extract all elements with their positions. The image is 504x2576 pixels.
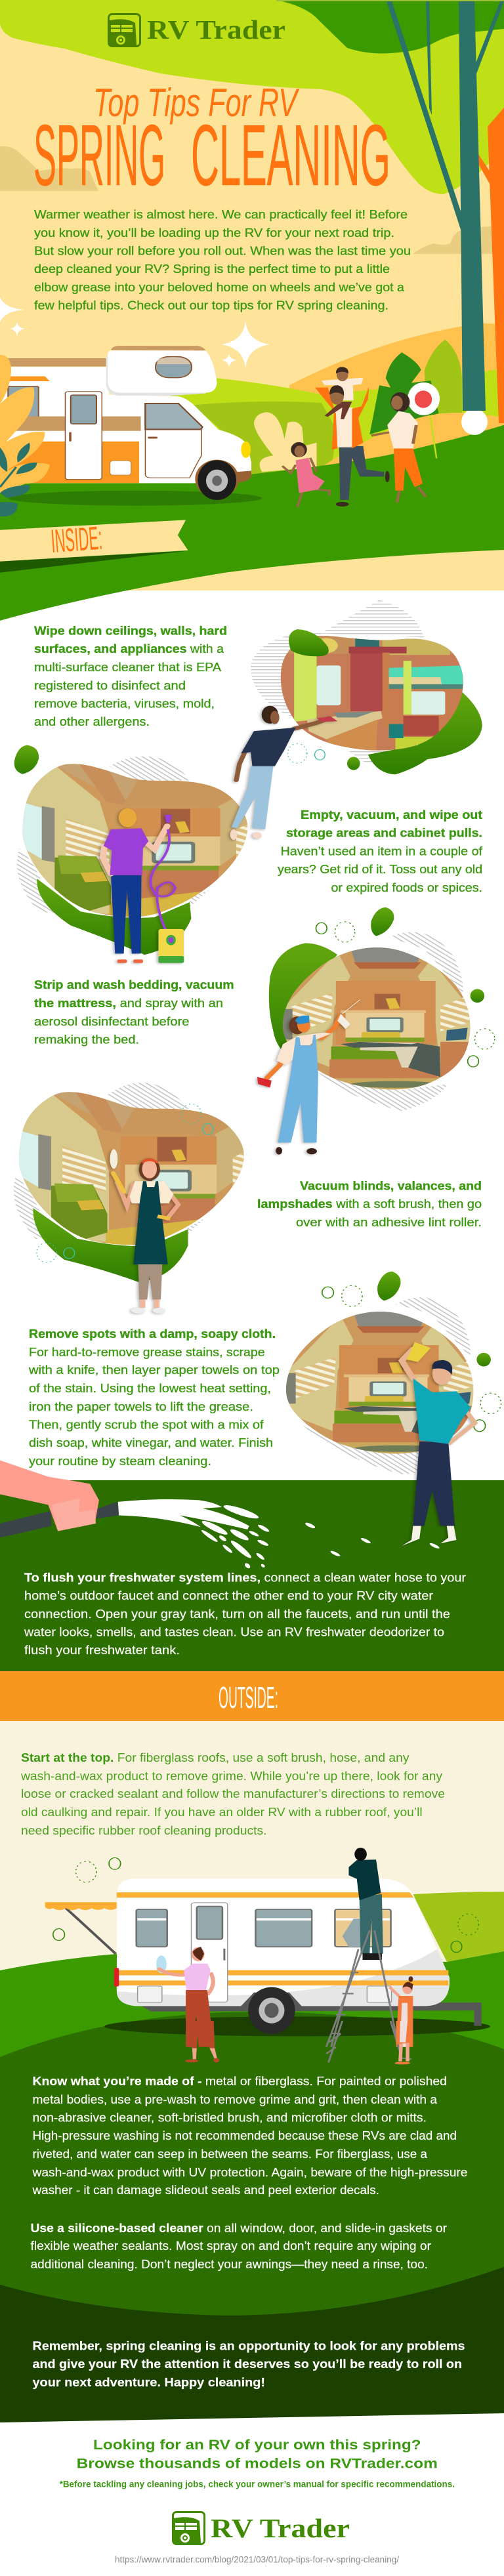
tip: empty storage: Empty, vacuum, and wipe out <box>301 808 482 821</box>
ring: solid <box>474 1420 486 1432</box>
hatch <box>395 1297 471 1358</box>
tip: freshwater: flush your freshwater tank. <box>24 1644 180 1657</box>
tree: orange trunk <box>478 108 504 423</box>
hill: orange background <box>289 323 504 432</box>
text: INSIDE: <box>50 520 104 560</box>
tip: start at the top: need specific rubber roof cleaning products. <box>21 1824 266 1837</box>
call to action <box>77 2437 438 2472</box>
ground shadow <box>104 2016 490 2036</box>
wheel <box>241 1987 301 2034</box>
panel: second illustrations <box>14 941 495 1358</box>
motorhome <box>0 346 262 506</box>
leaf blob: left <box>14 745 39 774</box>
sparkles <box>0 297 270 368</box>
green blob: bedroom <box>269 943 337 1059</box>
ring: green solid <box>322 1287 333 1298</box>
tree: white base <box>461 409 488 435</box>
tip: freshwater: connection. Open your gray tank, turn on all the faucets, and run until the <box>24 1608 450 1621</box>
intro text: But slow your roll before you roll out. When was the last time you <box>34 244 411 257</box>
hill: darker lime <box>193 402 337 474</box>
call to action: Browse thousands of models on RVTrader.com <box>77 2456 438 2472</box>
hill: left beige <box>0 146 98 191</box>
tip: spots <box>28 1327 280 1468</box>
logo: RV Trader bottom: RV Trader <box>211 2513 350 2543</box>
tip: blinds: Vacuum blinds, valances, and <box>300 1180 482 1193</box>
tip: start at the top: Start at the top. For fiberglass roofs, use a soft brush, hose, and any <box>21 1751 410 1764</box>
ring: teal dashed <box>181 1104 201 1124</box>
hatch: bedroom lower <box>318 1072 448 1111</box>
tip: empty storage: years? Get rid of it. Toss out any old <box>278 863 482 876</box>
tip: bedding: Strip and wash bedding, vacuum <box>34 978 234 991</box>
illustration: lounge interior <box>19 759 251 921</box>
ring: green dashed <box>335 922 355 942</box>
tip: start at the top <box>20 1751 445 1837</box>
ladder <box>326 1930 398 2047</box>
tip: empty storage: or expired foods or spices. <box>331 881 482 894</box>
tip: spots: Then, gently scrub the spot with a mix of <box>29 1419 264 1432</box>
dot: bedroom <box>471 989 484 1003</box>
tip: wipe down: multi-surface cleaner that is EPA <box>34 661 221 674</box>
tip: know what you're made of: non-abrasive cleaner, soft-bristled brush, and microfiber cloth or mitts. <box>33 2111 427 2125</box>
dot: green <box>347 757 360 770</box>
tip: spots: Remove spots with a damp, soapy cloth. <box>29 1327 276 1340</box>
target sign <box>408 383 440 458</box>
tip: spots: For hard-to-remove grease stains, scrape <box>29 1346 265 1359</box>
hatch: kitchen lower <box>347 750 418 765</box>
hill: lime right <box>413 1892 504 1962</box>
closing text: and give your RV the attention it deserves so you’ll be ready to roll on <box>33 2358 462 2371</box>
figure: woman with apron <box>110 1149 178 1314</box>
tip: silicone <box>30 2222 447 2271</box>
source url: https://www.rvtrader.com/blog/2021/03/01/top-tips-for-rv-spring-cleaning/ <box>115 2555 399 2565</box>
header foliage: dark green canopy <box>276 0 504 53</box>
plant: cream leaf <box>254 412 316 472</box>
figure: woman with vacuum <box>103 808 184 963</box>
logo: RV Trader top <box>108 13 285 47</box>
tip: spots: your routine by steam cleaning. <box>29 1455 211 1468</box>
tip: start at the top: loose or cracked sealant and follow the manufacturer’s directions to remove <box>21 1787 445 1800</box>
panel: last interior, hose <box>0 1305 501 1569</box>
leaf blob <box>377 1272 401 1300</box>
hill: lime <box>171 367 504 479</box>
panel: inside illustrations <box>14 600 484 1059</box>
figure: man on ladder <box>348 1848 383 1960</box>
ring: green <box>468 1056 478 1067</box>
tip: bedding: remaking the bed. <box>34 1033 139 1047</box>
tip: know what you're made of: wash-and-wax product with UV protection. Again, beware of the high-pressure <box>32 2166 467 2179</box>
ring: teal lower <box>64 1248 75 1258</box>
tip: wipe down: registered to disinfect and <box>34 679 186 692</box>
hatch: bedroom <box>389 932 463 993</box>
ring: teal <box>203 1123 213 1134</box>
water spray <box>118 1499 440 1569</box>
title: SPRING <box>33 107 165 203</box>
hill: right beige <box>413 225 504 254</box>
intro text: elbow grease into your beloved home on wheels and we’ve got a <box>34 281 405 294</box>
footer band: dark green <box>0 2257 504 2422</box>
plant: lime leaf <box>425 339 462 413</box>
figure: man with cloth <box>402 1342 475 1546</box>
tip: silicone: Use a silicone-based cleaner on all window, door, and slide-in gaskets or <box>30 2222 447 2235</box>
trailer body <box>114 1879 450 2006</box>
tip: know what you're made of: Know what you’re made of - metal or fiberglass. For painted or polished <box>33 2075 447 2088</box>
ring: teal dashed lower <box>37 1243 56 1262</box>
figure: mother <box>371 392 426 503</box>
figure: woman washing <box>156 1947 214 2047</box>
illustration: kitchen interior <box>276 633 466 755</box>
closing text: your next adventure. Happy cleaning! <box>33 2376 265 2389</box>
tip: empty storage: storage areas and cabinet pulls. <box>286 827 482 840</box>
intro text: few helpful tips. Check out our top tips for RV spring cleaning. <box>34 299 388 312</box>
rings <box>53 1858 478 1953</box>
tip: wipe down <box>34 625 227 728</box>
figure: man wiping kitchen counter <box>230 706 337 840</box>
intro text: you know it, you’ll be loading up the RV for your next road trip. <box>34 226 394 239</box>
tip: empty storage <box>278 808 483 894</box>
closing text: Remember, spring cleaning is an opportunity to look for any problems <box>33 2340 465 2353</box>
closing text <box>33 2340 465 2389</box>
hill: front orange band <box>322 413 504 479</box>
tip: wipe down: and other allergens. <box>34 715 150 728</box>
scene: trailer and cleaners <box>45 1848 490 2047</box>
tip: freshwater: water looks, smells, and tastes clean. Use an RV freshwater deodorizer to <box>24 1626 444 1639</box>
title: Top Tips For RV <box>93 81 300 125</box>
green blob: second lounge <box>33 1208 188 1282</box>
tip: spots: iron the paper towels to lift the grease. <box>29 1400 253 1413</box>
header foliage: lime canopy <box>0 0 504 194</box>
footnote: *Before tackling any cleaning jobs, check your owner’s manual for specific recommendations. <box>60 2480 455 2489</box>
figures: lower legs <box>185 2021 413 2064</box>
background: top sky <box>0 0 504 591</box>
chassis <box>142 2003 482 2026</box>
hatch: lounge <box>17 757 209 914</box>
figure: girl <box>282 442 329 507</box>
illustration: bedroom interior <box>276 941 476 1096</box>
ring: dashed green <box>474 1029 495 1049</box>
tip: know what you're made of: metal bodies, use a pre-wash to remove grime and grit, then clean with a <box>33 2093 438 2106</box>
hatch: lower <box>296 1418 425 1474</box>
tip: bedding <box>34 978 234 1047</box>
hatch: kitchen blob <box>251 600 425 726</box>
text: OUTSIDE: <box>219 1680 278 1714</box>
hose and hand <box>0 1461 119 1537</box>
tip: spots: dish soap, white vinegar, and water. Finish <box>29 1436 273 1449</box>
hatch: second lounge <box>14 1083 205 1241</box>
figure: woman spraying <box>257 1000 360 1155</box>
tip: spots: with a knife, then layer paper towels on top <box>28 1363 280 1377</box>
leaf blob: bedroom <box>371 907 394 936</box>
ring: green dashed <box>342 1285 362 1306</box>
tip: know what you're made of: riveted, and water can seep in between the seams. For fiberglass, use a <box>33 2148 428 2161</box>
figure: woman at ladder <box>390 1976 413 2047</box>
ribbon: inside <box>0 520 188 562</box>
tip: wipe down: surfaces, and appliances with a <box>34 642 224 655</box>
figure: father carrying child <box>315 367 390 507</box>
tip: blinds: lampshades with a soft brush, then go <box>257 1197 482 1211</box>
tip: start at the top: old caulking and repair. If you have an older RV with a rubber roof, you’ll <box>21 1806 423 1819</box>
logo: RV Trader top: RV Trader <box>147 14 285 45</box>
scene: campground with motorhome and family <box>0 323 504 621</box>
illustration: second lounge interior <box>16 1087 247 1249</box>
tree: teal trunk and branches <box>387 1 504 411</box>
tip: freshwater: home’s outdoor faucet and connect the other end to your RV city water <box>24 1589 433 1602</box>
ring: dashed teal <box>287 743 307 763</box>
plant: left foliage <box>0 355 50 516</box>
tip: blinds: over with an adhesive lint roller. <box>296 1216 482 1229</box>
leaf blob: top <box>289 629 329 656</box>
tip: freshwater <box>24 1571 466 1657</box>
illustration: bedroom interior <box>280 1305 479 1460</box>
tip: wipe down: remove bacteria, viruses, mold, <box>34 697 215 710</box>
intro text: deep cleaned your RV? Spring is the perfect time to put a little <box>34 262 390 276</box>
tip: know what you're made of <box>32 2075 467 2197</box>
tip: bedding: aerosol disinfectant before <box>34 1015 189 1028</box>
ground <box>0 425 504 621</box>
logo: RV Trader bottom <box>172 2511 350 2545</box>
hill: mid green body <box>0 2012 504 2316</box>
tip: know what you're made of: washer - it can damage slideout seals and peel exterior decals. <box>32 2184 379 2197</box>
background: lower white <box>0 591 504 2576</box>
tip: freshwater: To flush your freshwater system lines, connect a clean water hose to your <box>24 1571 466 1585</box>
ribbon shadow <box>0 551 188 573</box>
tip: wipe down: Wipe down ceilings, walls, hard <box>34 625 227 638</box>
awning <box>45 1902 117 1954</box>
dot: green <box>476 1353 491 1366</box>
intro text: Warmer weather is almost here. We can practically feel it! Before <box>34 208 408 221</box>
band: outside orange <box>0 1671 504 1721</box>
band: outside cream <box>0 1721 504 2062</box>
tip: silicone: additional cleaning. Don’t neglect your awnings—they need a rinse, too. <box>30 2258 428 2271</box>
ring: green solid <box>316 923 327 934</box>
top edge line <box>276 0 504 1</box>
tip: silicone: flexible weather sealants. Most spray on and don’t require any wiping or <box>30 2239 431 2253</box>
intro text <box>34 208 411 312</box>
band: freshwater green <box>0 1480 504 1671</box>
hill: bright green <box>0 1951 504 2100</box>
tip: bedding: the mattress, and spray with an <box>34 997 223 1010</box>
green blob: kitchen <box>368 692 482 774</box>
tip: know what you're made of: High-pressure washing is not recommended because these RVs are clad and <box>33 2129 457 2142</box>
plant: dark leaf <box>369 352 439 434</box>
tip: empty storage: Haven’t used an item in a couple of <box>281 845 483 858</box>
tip: spots: of the stain. Using the lowest heat setting, <box>29 1382 271 1395</box>
call to action: Looking for an RV of your own this spring? <box>93 2437 421 2453</box>
ring: dashed <box>480 1393 501 1414</box>
green blob: lounge <box>37 879 191 955</box>
ring: teal <box>315 749 325 760</box>
tip: start at the top: wash-and-wax product to remove grime. While you’re up there, look for any <box>20 1770 442 1783</box>
tip: blinds <box>257 1180 482 1229</box>
